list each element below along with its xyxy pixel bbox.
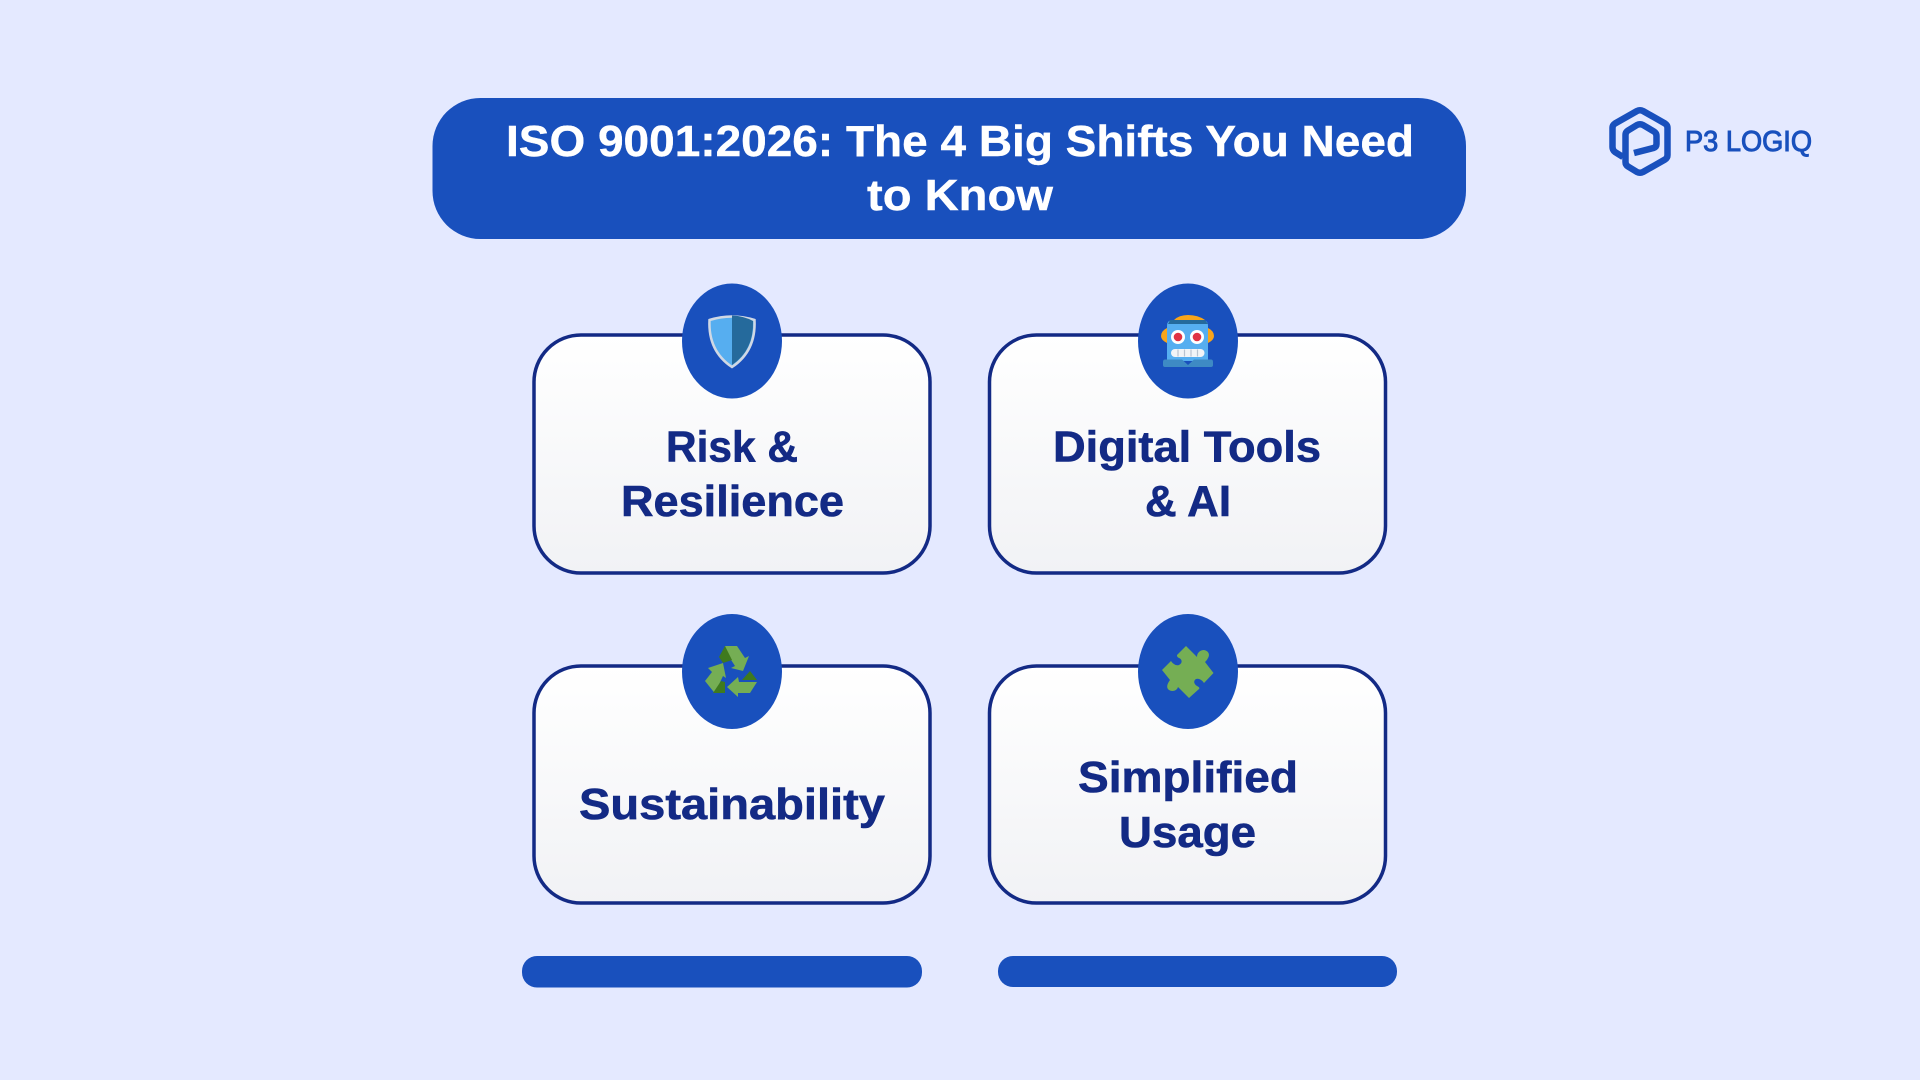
icon: robot: [1138, 284, 1238, 398]
title banner: [432, 98, 1466, 239]
title banner: to Know: [867, 171, 1054, 220]
card: Simplified Usage: [990, 666, 1386, 903]
card: Risk & Resilience: Resilience: [621, 477, 844, 526]
icon: recycle: [682, 614, 782, 729]
bar: right: [998, 956, 1397, 987]
card: Simplified Usage: Usage: [1119, 808, 1256, 857]
icon: puzzle piece: [1138, 614, 1238, 729]
logo: P3 LOGIQ: [1612, 110, 1812, 173]
card: Digital Tools & AI: Digital Tools: [1053, 422, 1321, 472]
icon: shield: [682, 284, 782, 398]
title banner: ISO 9001:2026: The 4 Big Shifts You Need: [506, 117, 1414, 166]
card: Sustainability: Sustainability: [579, 780, 886, 829]
card: Risk & Resilience: [534, 335, 930, 573]
logo: P3 LOGIQ: P3 LOGIQ: [1685, 126, 1812, 158]
card: Digital Tools & AI: [990, 335, 1386, 573]
card: Digital Tools & AI: & AI: [1145, 477, 1231, 526]
card: Simplified Usage: Simplified: [1078, 753, 1298, 802]
card: Risk & Resilience: Risk &: [666, 422, 798, 472]
bar: left: [522, 956, 922, 988]
card: Sustainability: [534, 666, 930, 903]
